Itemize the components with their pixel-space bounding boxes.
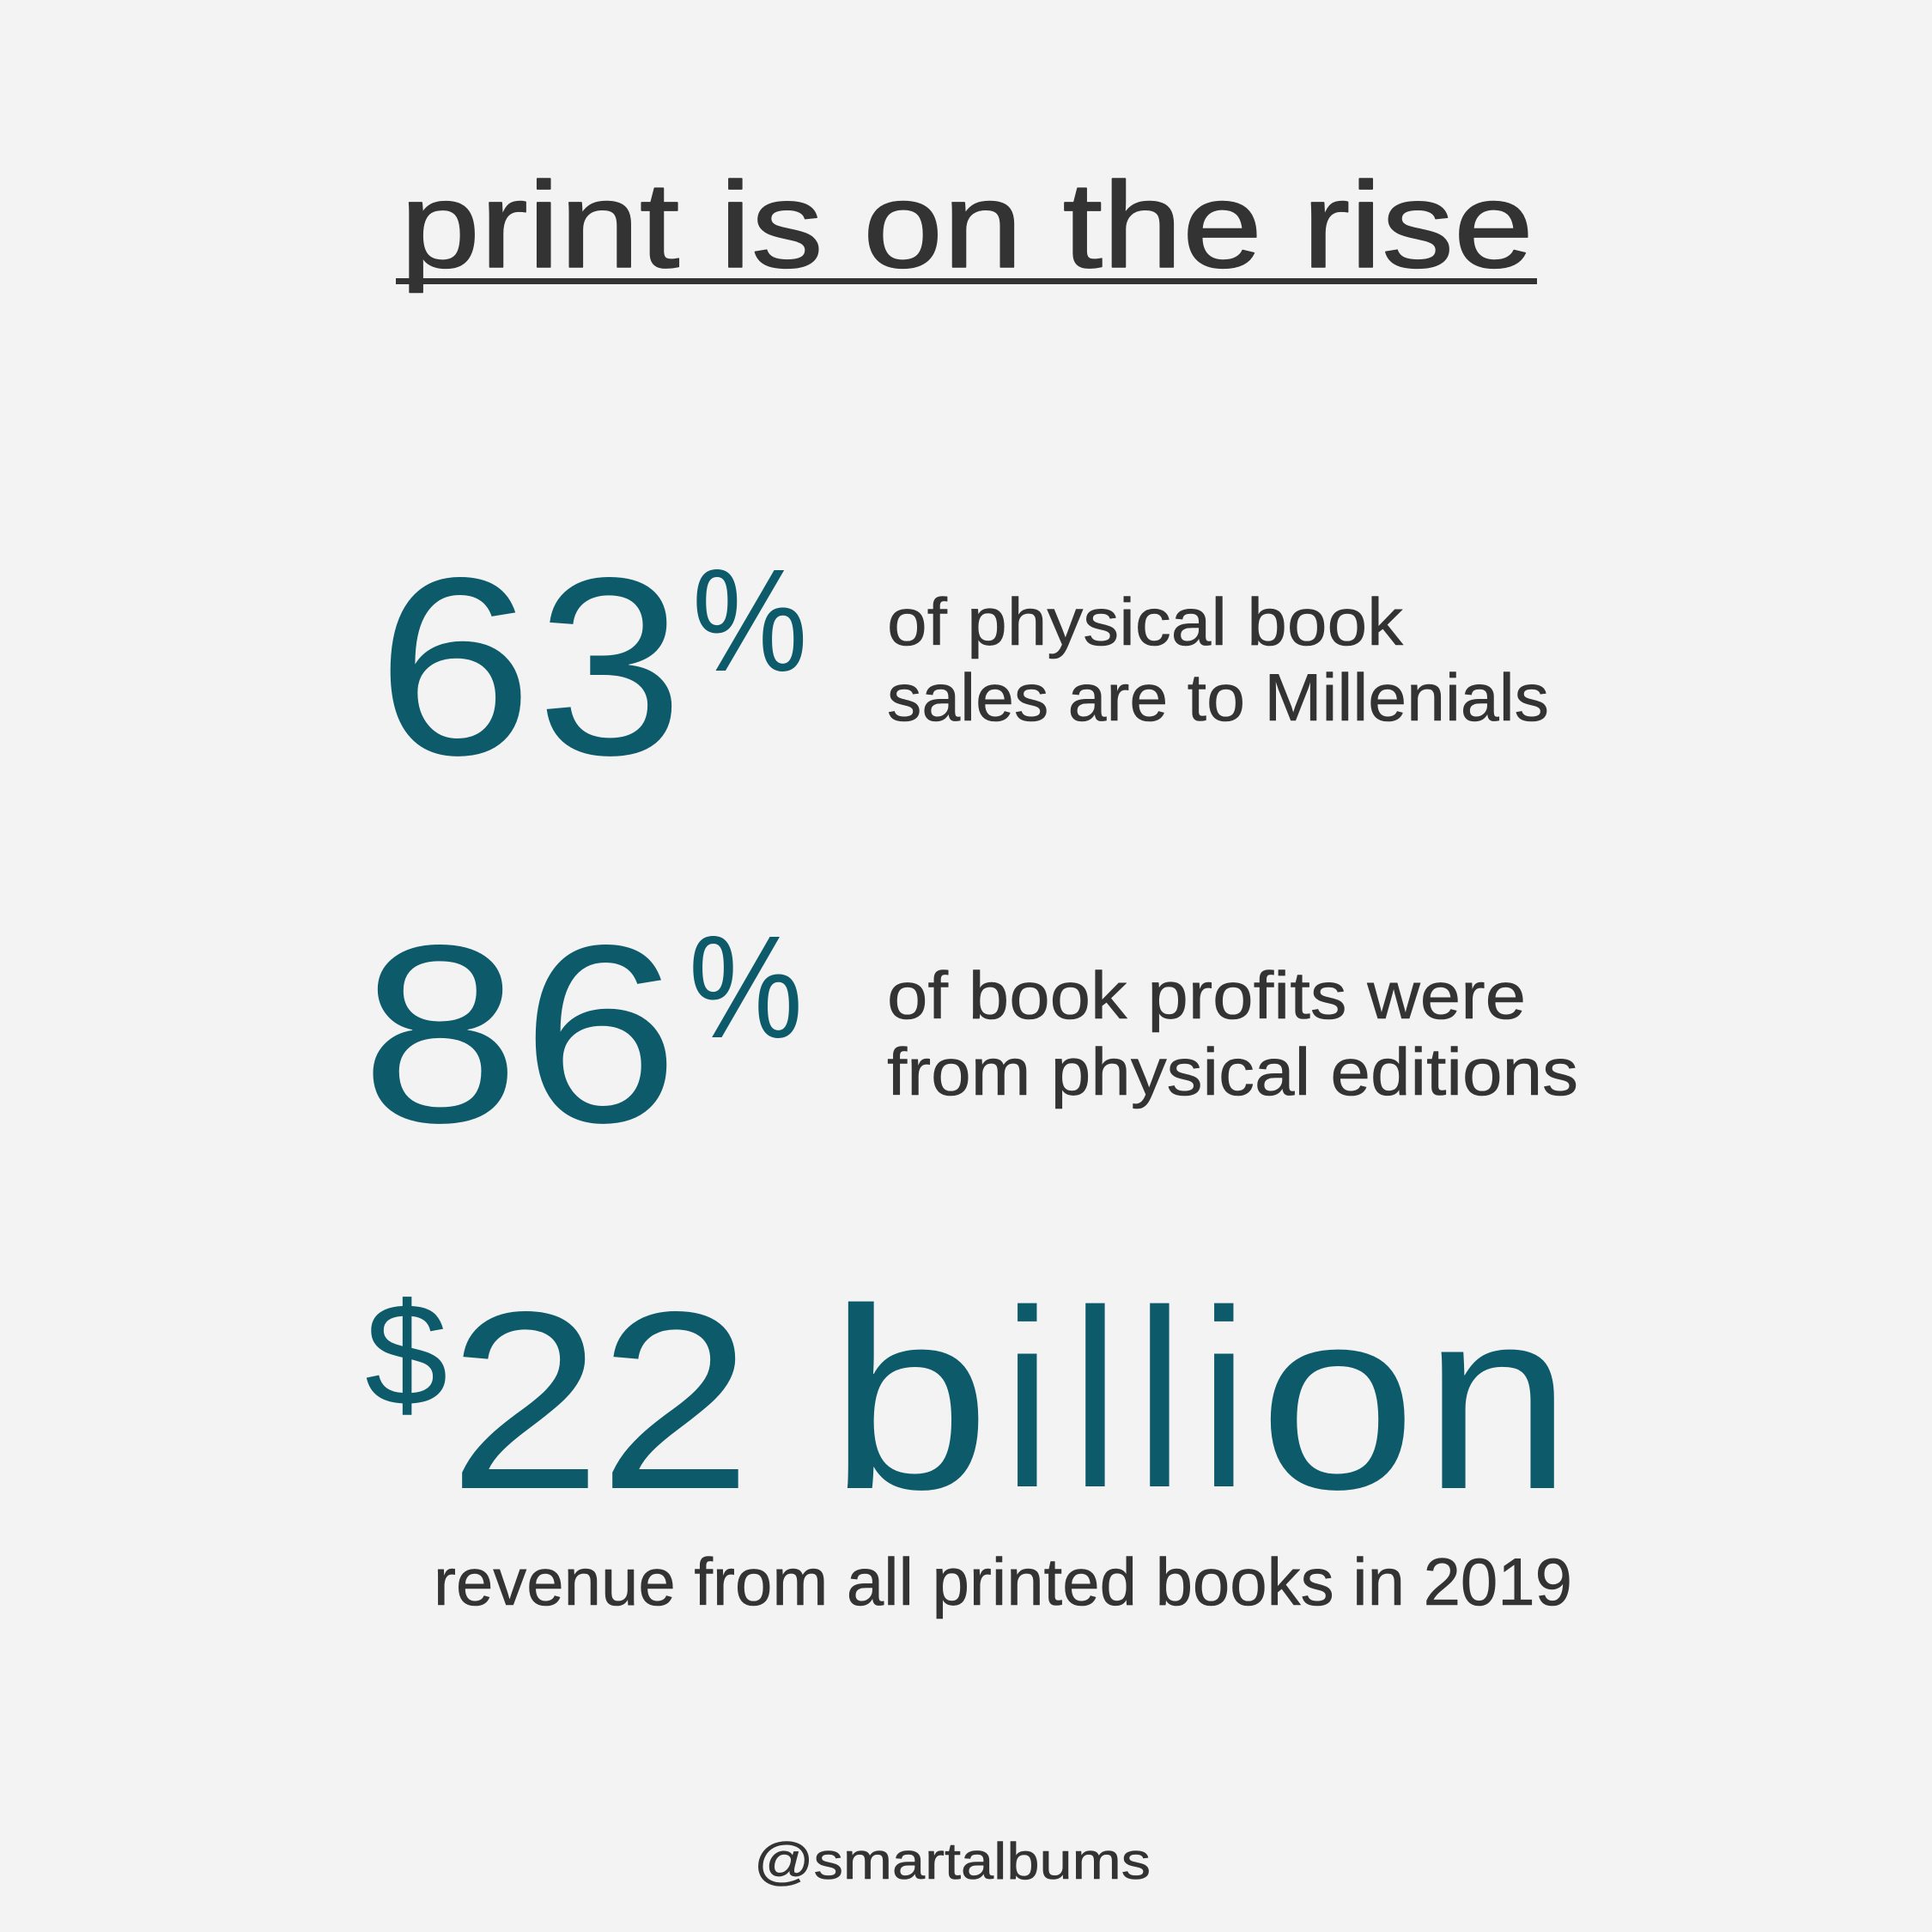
text: 86 percent description: of book profits were (887, 957, 1526, 1033)
stat: 63 percent: 6 (376, 526, 533, 808)
stat: 22 billion dollars: n (1424, 1255, 1571, 1543)
title: print is on the rise (400, 157, 1534, 294)
stat: 86 percent: 8 (361, 892, 519, 1176)
text: 63 percent description: of physical book (887, 584, 1404, 659)
stat: 22 billion dollars: o (1259, 1255, 1417, 1543)
stat: 22 billion dollars: $ (365, 1274, 447, 1437)
stat: 86 percent: % (689, 905, 803, 1068)
text: revenue description: revenue from all printed books in 2019 (434, 1544, 1572, 1619)
stat: 22 billion dollars: i (999, 1255, 1056, 1543)
stat: 63 percent (376, 525, 808, 808)
stat: 22 billion dollars: l (1131, 1255, 1188, 1543)
stat: 22 billion dollars: 2 (448, 1260, 602, 1542)
stat: 22 billion dollars: 2 (598, 1260, 752, 1542)
stat: 22 billion dollars: l (1066, 1255, 1124, 1543)
stat: 22 billion dollars: b (829, 1255, 991, 1543)
footer handle: @smartalbums (754, 1832, 1151, 1890)
stat: 22 billion dollars: i (1195, 1255, 1253, 1543)
text: 63 percent description: sales are to Millenials (887, 659, 1549, 735)
stat: 63 percent: 3 (537, 525, 683, 808)
stat: 86 percent (361, 892, 803, 1176)
text: 86 percent description: from physical editions (887, 1034, 1578, 1109)
stat: 86 percent: 6 (521, 892, 679, 1176)
text: 86 percent description (887, 957, 1578, 1109)
stat: 63 percent: % (692, 539, 808, 702)
text: 63 percent description (887, 584, 1549, 735)
stat: 22 billion dollars (365, 1255, 1571, 1543)
